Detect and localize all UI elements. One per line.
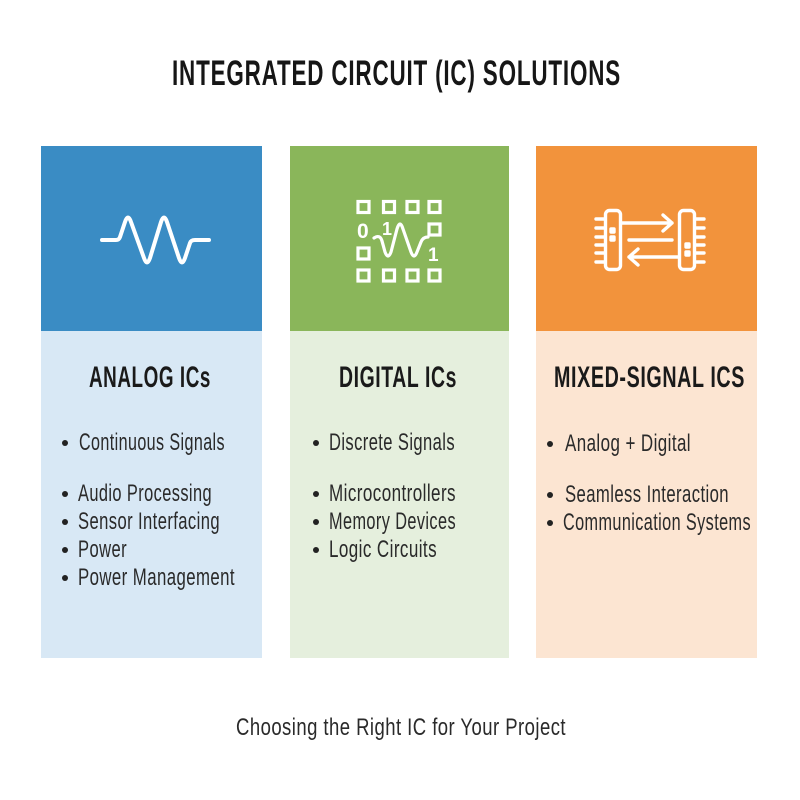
list: analog: Continuous Signals: [79, 429, 225, 456]
list: analog: Audio Processing: [78, 480, 212, 507]
list: analog: [62, 429, 235, 591]
icon: digital grid with waveform: 1: [382, 219, 392, 239]
list: digital: Microcontrollers: [329, 480, 456, 507]
list: analog: Power Management: [78, 564, 235, 591]
list: mixed-signal: [547, 430, 751, 536]
list: digital: [313, 429, 456, 563]
heading: analog: ANALOG ICs: [89, 361, 211, 394]
panel background: analog: [41, 331, 262, 658]
list: digital: Memory Devices: [329, 508, 456, 535]
icon: digital grid with waveform: [357, 202, 440, 281]
panel background: mixed-signal: [536, 331, 757, 658]
panel: digital ICs: [290, 146, 509, 658]
panel: analog ICs: [41, 146, 262, 658]
icon panel: mixed-signal: [536, 146, 757, 331]
icon: analog waveform: [102, 218, 209, 262]
list: digital: Logic Circuits: [329, 536, 437, 563]
panel background: digital: [290, 331, 509, 658]
list: analog: Sensor Interfacing: [78, 508, 220, 535]
icon: two chips with arrows: [596, 210, 704, 270]
list: mixed-signal: Analog + Digital: [565, 430, 691, 457]
footer text: Choosing the Right IC for Your Project: [236, 714, 566, 741]
list: analog: Power: [78, 536, 127, 563]
icon panel: digital: [290, 146, 509, 331]
icon panel: analog: [41, 146, 262, 331]
list: digital: Discrete Signals: [329, 429, 455, 456]
panel: mixed-signal ICs: [536, 146, 757, 658]
icon: digital grid with waveform: 1: [428, 245, 439, 266]
heading: digital: DIGITAL ICs: [339, 361, 457, 394]
icon: digital grid with waveform: 0: [357, 220, 369, 243]
list: mixed-signal: Seamless Interaction: [565, 481, 729, 508]
